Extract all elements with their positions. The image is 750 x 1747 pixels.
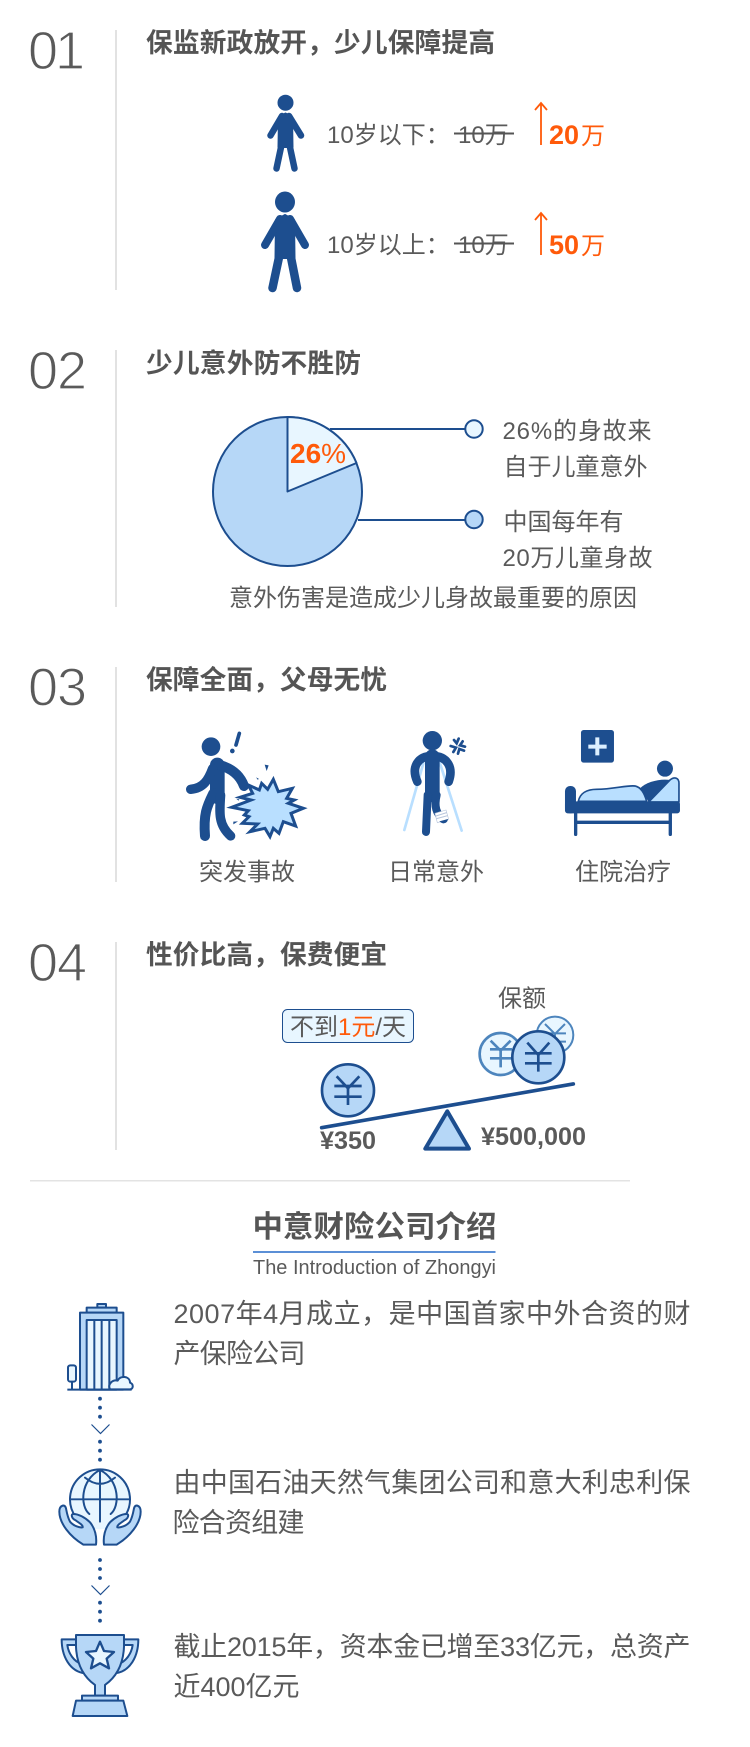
- label: sum insured: 保额: [498, 986, 546, 1012]
- caption: 意外伤害是造成少儿身故最重要的原因: [229, 585, 637, 612]
- subtitle: The Introduction of Zhongyi: [253, 1256, 496, 1279]
- callout 2: 中国每年有: [504, 509, 624, 536]
- connector 2: [92, 1558, 110, 1623]
- callout 1: [502, 418, 652, 481]
- leader 2: [358, 511, 483, 528]
- number 02: 02: [28, 341, 87, 401]
- section 04: [28, 933, 586, 1155]
- section 03: [28, 658, 680, 886]
- icon: hospital bed: [565, 730, 680, 834]
- connector 1: [92, 1397, 110, 1462]
- row: under 10: 10岁以下：: [327, 122, 450, 149]
- pie chart: [213, 417, 362, 566]
- coin: front right: [512, 1031, 564, 1083]
- badge: under 1 yuan per day: 不到1元/天: [290, 1014, 406, 1041]
- text: shareholders: [172, 1468, 690, 1538]
- label: accident: 突发事故: [199, 859, 295, 886]
- icon: small child: [270, 95, 301, 168]
- number 04: 04: [28, 933, 87, 993]
- pie label 26%: 26%: [290, 438, 346, 469]
- coin: back far: [537, 1017, 573, 1053]
- text: shareholders: 险合资组建: [172, 1508, 304, 1538]
- row: over 10: 50: [549, 230, 579, 260]
- text: capital: 近400亿元: [174, 1672, 300, 1702]
- text: shareholders: 由中国石油天然气集团公司和意大利忠利保: [174, 1468, 690, 1498]
- row: under 10: 10万: [458, 122, 509, 149]
- heading 02: 少儿意外防不胜防: [146, 348, 361, 378]
- callout 1: 26%的身故来: [502, 418, 652, 445]
- price label: ¥350: [320, 1127, 376, 1155]
- row: over 10: 万: [581, 233, 605, 260]
- heading 03: 保障全面，父母无忧: [146, 665, 387, 695]
- icon: adult: [265, 192, 305, 288]
- coin: left: [322, 1064, 374, 1116]
- callout 2: 20万儿童身故: [502, 545, 652, 572]
- icon: accident: [191, 733, 303, 837]
- fulcrum: [425, 1111, 469, 1149]
- text: founding: 2007年4月成立，是中国首家中外合资的财: [174, 1299, 690, 1329]
- section 01: [28, 21, 605, 290]
- number 03: 03: [28, 658, 87, 718]
- heading 01: 保监新政放开，少儿保障提高: [146, 28, 495, 58]
- text: capital: 截止2015年，资本金已增至33亿元，总资产: [174, 1632, 690, 1662]
- icon: globe in hands: [59, 1469, 141, 1545]
- icon: building: [67, 1304, 133, 1390]
- text: capital: [174, 1632, 690, 1702]
- number 01: 01: [28, 21, 85, 81]
- coverage label: ¥500,000: [481, 1123, 586, 1151]
- coin: back left: [480, 1033, 522, 1075]
- text: founding: [174, 1299, 690, 1369]
- row: under 10: 20: [549, 120, 579, 150]
- label: hospital: 住院治疗: [575, 859, 671, 886]
- row: under 10: [327, 103, 605, 150]
- row: under 10: 万: [581, 123, 605, 150]
- label: daily: 日常意外: [388, 859, 484, 886]
- seesaw chart: [322, 1017, 573, 1149]
- icon: crutches: [404, 731, 465, 832]
- leader 1: [330, 420, 483, 438]
- section 02: [28, 341, 652, 612]
- icon: trophy: [62, 1635, 138, 1716]
- company intro heading: 中意财险公司介绍: [252, 1210, 496, 1244]
- callout 1: 自于儿童意外: [504, 454, 648, 481]
- icon: pain mark: [451, 739, 465, 754]
- row: over 10: 10岁以上：: [327, 232, 450, 259]
- callout 2: [502, 509, 652, 572]
- row: over 10: [327, 213, 605, 260]
- company intro heading: [252, 1210, 496, 1279]
- heading 04: 性价比高，保费便宜: [146, 940, 387, 970]
- text: founding: 产保险公司: [174, 1339, 306, 1369]
- row: over 10: 10万: [458, 232, 509, 259]
